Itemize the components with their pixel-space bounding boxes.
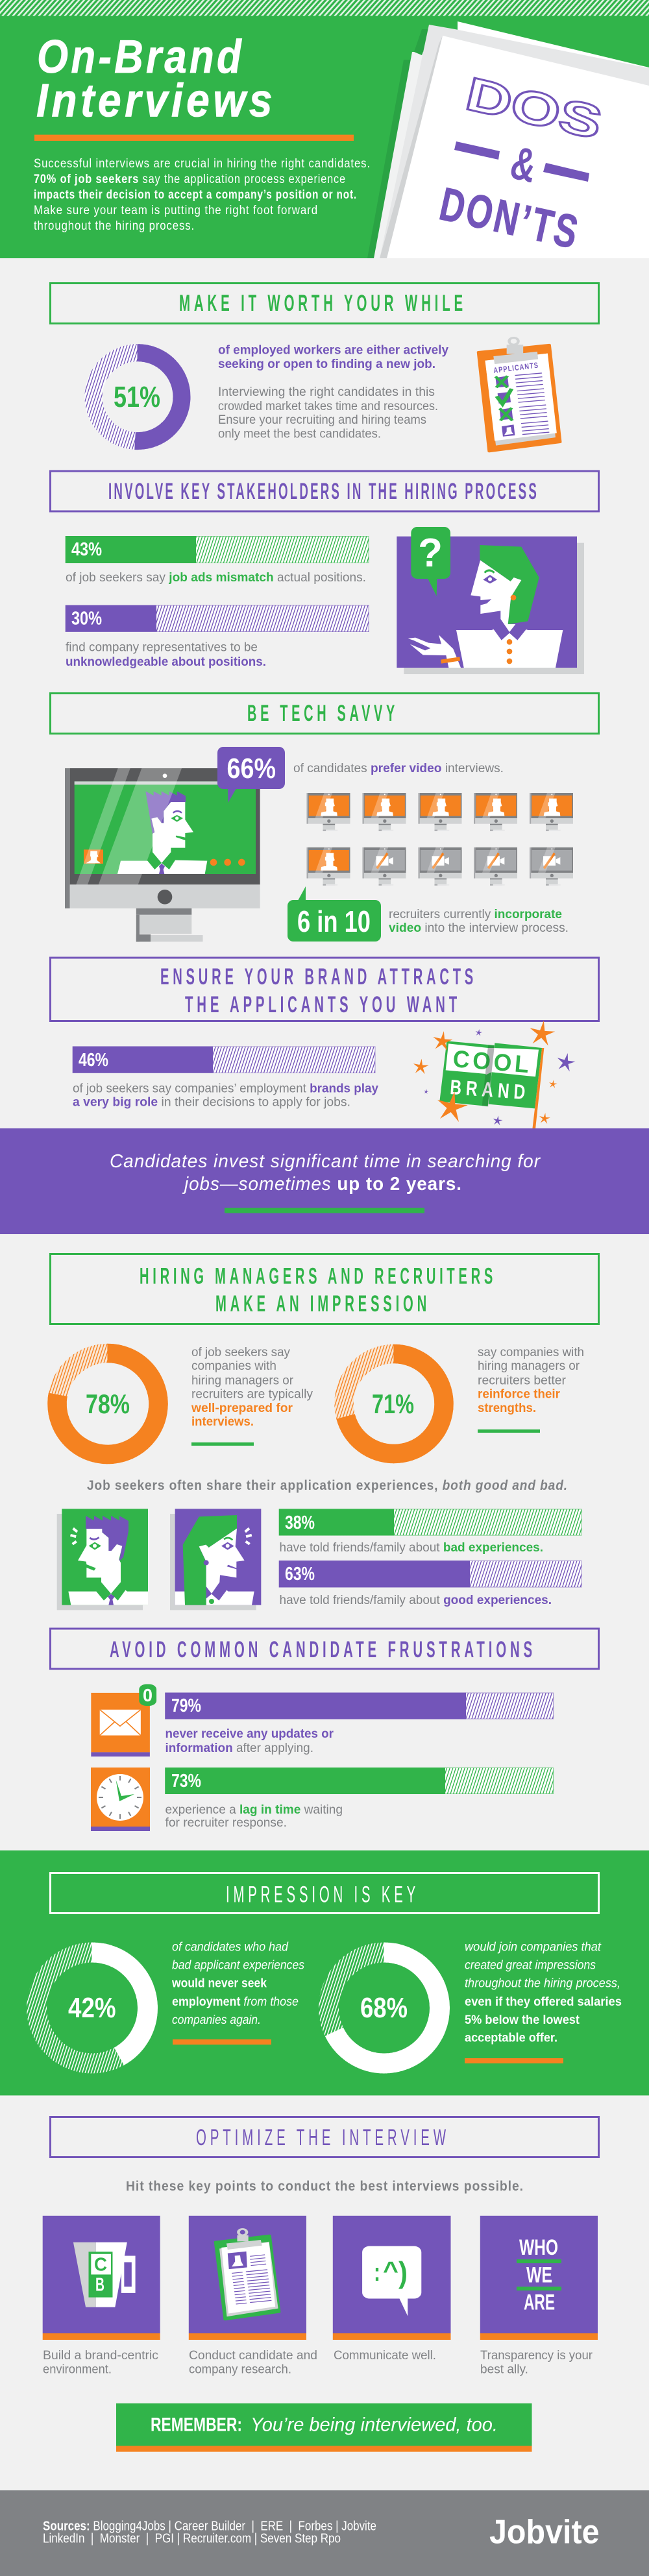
card: brand-centric mug: C: [94, 2254, 107, 2275]
text: would join companies: created great impressions: [465, 1958, 596, 1973]
purple band: candidates invest time: jobs—sometimes up to 2 years.: [182, 1174, 462, 1195]
donut chart: 71%: 71%: [372, 1389, 414, 1419]
paper heading: dos and don'ts: DOS: [461, 68, 607, 149]
card: communicate speech bubble: ^: [383, 2257, 398, 2285]
callout bubble: 6 in 10: [288, 886, 381, 942]
card: who we are: ARE: [524, 2290, 555, 2315]
intro text: [34, 157, 371, 233]
text: would join companies: acceptable offer.: [465, 2031, 557, 2045]
text: recruiters incorporate video: video into the interview process.: [389, 921, 569, 935]
stacked papers: [367, 21, 649, 258]
bar chart: 38%: [279, 1509, 582, 1535]
text: would join companies: would join companies that: [465, 1940, 602, 1954]
text: well-prepared for interviews: well-prepared for: [191, 1402, 293, 1415]
card: brand-centric mug: B: [95, 2275, 104, 2296]
section heading: impression is key: [51, 1873, 598, 1913]
section heading: make it worth your while: [51, 283, 598, 323]
text: would never seek employment: employment from those: [172, 1995, 299, 2009]
accent line: [465, 2058, 563, 2063]
icon grid: 10 monitors, 6 with video: [306, 793, 573, 886]
caption: company research.: [189, 2363, 291, 2377]
text: employed workers: crowded market takes time and resources.: [218, 400, 438, 413]
callout: remember: REMEMBER:: [151, 2414, 242, 2436]
section heading: impression is key: IMPRESSION IS KEY: [226, 1882, 419, 1908]
caption: Communicate well.: [334, 2349, 436, 2363]
illustration: woman asking a question: ?: [418, 531, 443, 576]
footer panel: [0, 2490, 649, 2576]
donut chart: 42%: [36, 1952, 148, 2063]
text: reinforce their strengths: [478, 1346, 584, 1415]
text: reinforce their strengths: reinforce their: [478, 1387, 561, 1402]
callout bubble: 6 in 10: 6 in 10: [297, 905, 371, 938]
card: communicate speech bubble: [333, 2216, 450, 2340]
section heading: be tech savvy: [51, 693, 598, 733]
bar chart: 63%: [279, 1561, 582, 1587]
text: lag in time: [165, 1803, 343, 1830]
header green background: [0, 16, 649, 258]
bar chart: 30%: [66, 605, 369, 632]
section heading: involve key stakeholders: [51, 471, 598, 511]
accent line: [173, 2039, 271, 2045]
section heading: ensure your brand: [51, 958, 598, 1021]
text: job ads mismatch: of job seekers say job ads mismatch actual positions.: [66, 571, 366, 585]
bar chart: 46%: 46%: [79, 1050, 108, 1071]
text: would never seek employment: companies again.: [172, 2013, 261, 2027]
text: employed workers: Ensure your recruiting and hiring teams: [218, 413, 426, 427]
donut chart: 78%: [57, 1354, 158, 1455]
card: communicate speech bubble: ): [398, 2255, 408, 2289]
purple band: candidates invest time: Candidates invest significant time in searching for: [110, 1151, 541, 1172]
text: would join companies: even if they offered salaries: [465, 1995, 622, 2009]
icon: applicants clipboard: APPLICANTS: [493, 361, 539, 375]
header panel: [0, 0, 649, 259]
bar chart: 79%: [165, 1692, 553, 1719]
text: lag in time: for recruiter response.: [165, 1816, 287, 1830]
card: communicate speech bubble: :: [374, 2258, 380, 2287]
caption: best ally.: [480, 2363, 528, 2377]
title: Interviews: [36, 75, 276, 127]
caption: Build a brand-centric: [43, 2349, 158, 2363]
icon: email with badge: [91, 1684, 156, 1756]
text: job seekers share: Job seekers often share their application experiences, both good and bad.: [87, 1478, 568, 1493]
accent line: [478, 1429, 540, 1433]
text: hit these key points: Hit these key points to conduct the best interviews possible.: [126, 2179, 524, 2194]
illustration: woman asking a question: [397, 527, 584, 674]
illustration: upset man: [57, 1509, 148, 1610]
bar chart: 46%: [73, 1046, 375, 1073]
text: recruiters incorporate video: [389, 908, 569, 935]
bar chart: 63%: 63%: [285, 1564, 315, 1585]
text: never receive updates: never receive any updates or: [165, 1727, 334, 1741]
title: [36, 31, 276, 127]
text: well-prepared for interviews: hiring managers or: [191, 1374, 294, 1387]
illustration: cool brand flag with stars: COOL: [452, 1045, 533, 1078]
donut chart: 51%: [93, 353, 182, 441]
text: never receive updates: information after applying.: [165, 1742, 313, 1755]
callout: remember: [116, 2403, 532, 2452]
intro text: Successful interviews are crucial in hiring the right candidates.: [34, 157, 371, 171]
text: employed workers: only meet the best candidates.: [218, 427, 381, 441]
section heading: avoid common candidate frustrations: [51, 1629, 598, 1669]
text: brands play a big role: of job seekers say companies’ employment brands play: [73, 1082, 378, 1095]
bar chart: 38%: 38%: [285, 1513, 315, 1533]
purple band: candidates invest time: [0, 1128, 649, 1234]
text: bad experiences: have told friends/family about bad experiences.: [279, 1541, 543, 1555]
sources: LinkedIn | Monster | PGI | Recruiter.com | Seven Step Rpo: [43, 2532, 341, 2546]
text: well-prepared for interviews: companies with: [191, 1359, 276, 1373]
illustration: cool brand flag with stars: BRAND: [449, 1075, 530, 1104]
section heading: optimize the interview: OPTIMIZE THE INTERVIEW: [196, 2125, 450, 2150]
intro text: 70% of job seekers say the application process experience: [34, 173, 346, 186]
caption: [43, 2349, 158, 2377]
bar chart: 73%: 73%: [171, 1771, 201, 1792]
text: would never seek employment: of candidates who had: [172, 1940, 289, 1954]
section heading: hiring managers and recruiters: [51, 1254, 598, 1324]
caption: [480, 2349, 593, 2377]
text: unknowledgeable: find company representatives to be: [66, 641, 258, 655]
sources: Sources: Blogging4Jobs | Career Builder | ERE | Forbes | Jobvite: [43, 2520, 376, 2534]
text: well-prepared for interviews: interviews.: [191, 1415, 254, 1429]
text: employed workers: Interviewing the right candidates in this: [218, 385, 435, 399]
title underline: [34, 135, 354, 141]
icon: applicants clipboard: [478, 338, 560, 451]
panel: impression is key: [0, 1851, 649, 2095]
section heading: optimize the interview: [51, 2117, 598, 2157]
bar chart: 73%: [165, 1768, 553, 1794]
illustration: desktop monitor video call: [65, 768, 260, 942]
intro text: Make sure your team is putting the right foot forward: [34, 204, 318, 217]
section heading: ensure your brand: THE APPLICANTS YOU WANT: [185, 992, 461, 1017]
text: brands play a big role: [73, 1082, 378, 1110]
text: reinforce their strengths: recruiters better: [478, 1374, 567, 1387]
bar chart: 43%: [66, 536, 369, 563]
text: would join companies: [465, 1940, 622, 2045]
text: unknowledgeable: unknowledgeable about positions.: [66, 655, 266, 669]
text: would join companies: 5% below the lowest: [465, 2013, 580, 2027]
text: would never seek employment: would never seek: [171, 1976, 267, 1991]
paper heading: dos and don'ts: &: [506, 137, 541, 193]
illustration: happy woman: [170, 1509, 261, 1610]
text: would join companies: throughout the hiring process,: [465, 1976, 620, 1991]
bar chart: 30%: 30%: [71, 609, 102, 629]
text: would never seek employment: [171, 1940, 304, 2027]
callout bubble: 66%: [217, 747, 285, 803]
caption: Conduct candidate and: [189, 2349, 317, 2363]
icon: clock: [91, 1768, 150, 1831]
sources: [43, 2520, 376, 2546]
text: well-prepared for interviews: [191, 1346, 313, 1429]
text: would never seek employment: bad applicant experiences: [172, 1958, 304, 1973]
green band: [0, 1851, 649, 2095]
text: good experiences: have told friends/family about good experiences.: [279, 1594, 552, 1607]
top stripe band: [0, 0, 649, 16]
card: who we are: WE: [526, 2263, 552, 2288]
card: who we are: [480, 2216, 598, 2340]
text: employed workers: [218, 344, 448, 441]
text: recruiters incorporate video: recruiters currently incorporate: [389, 908, 562, 921]
card: brand-centric mug: [43, 2216, 160, 2340]
callout bubble: 66%: 66%: [227, 753, 276, 784]
bar chart: 79%: 79%: [171, 1695, 201, 1716]
caption: environment.: [43, 2363, 112, 2377]
text: brands play a big role: a very big role in their decisions to apply for jobs.: [73, 1095, 350, 1110]
donut chart: 78%: 78%: [86, 1389, 130, 1419]
card: candidate research clipboard: [189, 2216, 306, 2340]
text: unknowledgeable: [66, 641, 266, 669]
section heading: hiring managers and recruiters: MAKE AN IMPRESSION: [215, 1291, 430, 1317]
icon: email with badge: 0: [143, 1685, 153, 1705]
text: lag in time: experience a lag in time waiting: [165, 1803, 343, 1817]
text: well-prepared for interviews: of job seekers say: [191, 1346, 290, 1359]
intro text: impacts their decision to accept a company’s position or not.: [34, 188, 357, 202]
text: prefer video: of candidates prefer video interviews.: [293, 762, 504, 775]
donut chart: 42%: 42%: [68, 1992, 116, 2024]
accent line: [191, 1442, 254, 1446]
text: employed workers: of employed workers are either actively: [218, 344, 448, 357]
paper heading: dos and don'ts: [435, 68, 607, 259]
text: reinforce their strengths: strengths.: [478, 1402, 536, 1415]
donut chart: 68%: [328, 1952, 440, 2063]
callout: remember: You’re being interviewed, too.: [251, 2414, 498, 2436]
text: employed workers: seeking or open to finding a new job.: [218, 358, 435, 371]
card: who we are: WHO: [519, 2235, 558, 2260]
logo: Jobvite: Jobvite: [489, 2513, 600, 2551]
text: well-prepared for interviews: recruiters are typically: [191, 1387, 313, 1402]
section heading: be tech savvy: BE TECH SAVVY: [247, 701, 398, 726]
intro text: throughout the hiring process.: [34, 219, 195, 233]
text: reinforce their strengths: say companies with: [478, 1346, 584, 1359]
text: never receive updates: [165, 1727, 334, 1755]
text: reinforce their strengths: hiring managers or: [478, 1359, 580, 1373]
donut chart: 51%: 51%: [114, 380, 160, 413]
illustration: cool brand flag with stars: [412, 1019, 577, 1129]
caption: [189, 2349, 317, 2377]
donut chart: 71%: [344, 1354, 444, 1453]
paper heading: dos and don'ts: DON’TS: [435, 178, 585, 259]
caption: Transparency is your: [480, 2349, 593, 2363]
bar chart: 43%: 43%: [71, 539, 102, 560]
title: On-Brand: [37, 31, 244, 83]
donut chart: 68%: 68%: [360, 1992, 408, 2024]
